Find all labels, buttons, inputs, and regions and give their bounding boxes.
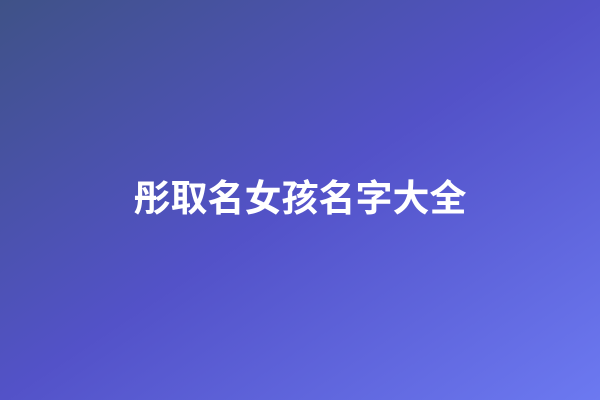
title: 彤取名女孩名字大全 bbox=[134, 178, 466, 219]
